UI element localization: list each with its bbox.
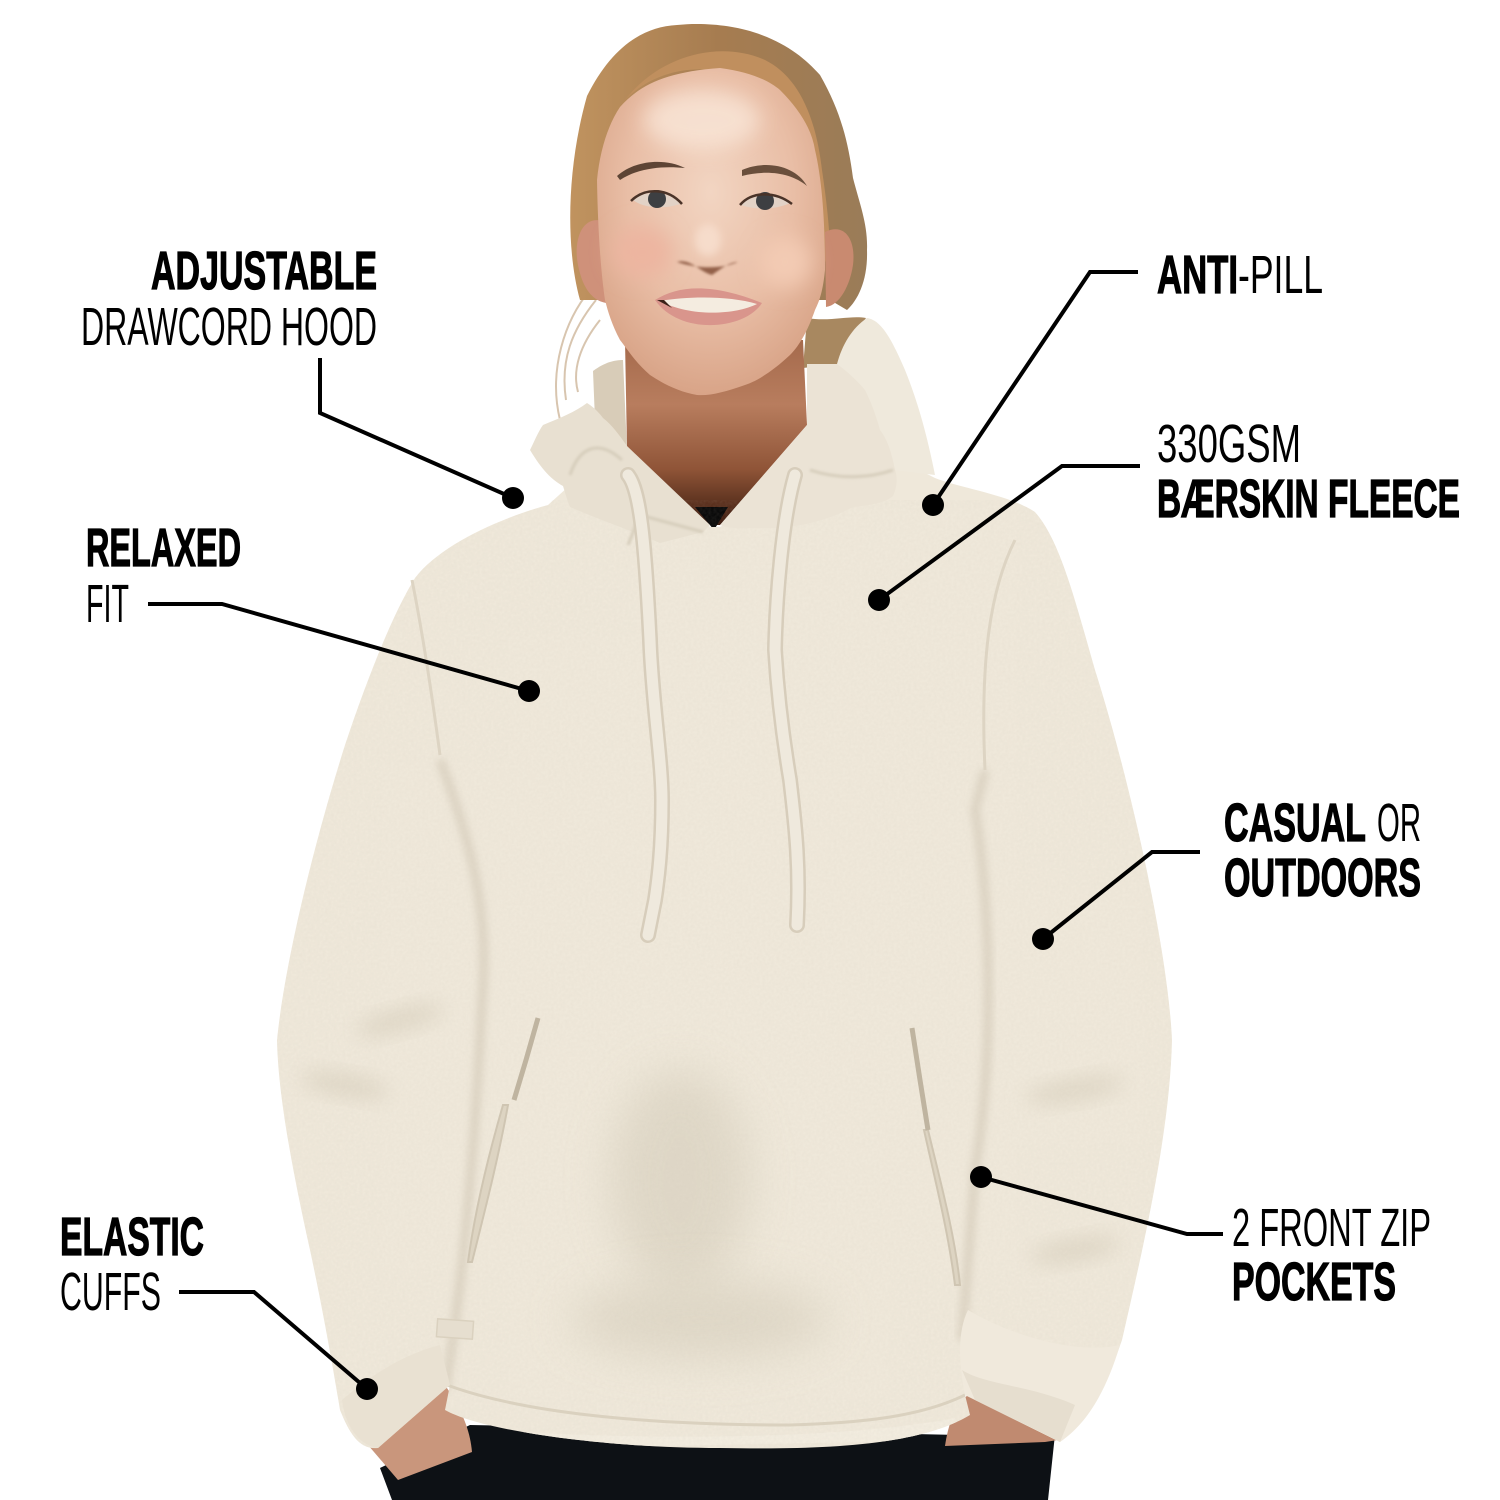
hoodie shading: [270, 500, 1180, 1460]
left drawcord: [628, 475, 662, 935]
mouth: [655, 288, 762, 325]
stray hair strands: [556, 290, 600, 420]
label: CASUAL: [1224, 793, 1366, 853]
leader line: [1043, 852, 1200, 939]
black undershirt: [695, 507, 728, 530]
hood right flap: [720, 364, 897, 528]
face light areas: [644, 90, 760, 150]
callout: adjustable drawcord hood: [81, 241, 524, 509]
ears: [577, 220, 606, 303]
left cuff ribbing: [342, 1345, 450, 1448]
callout: anti-pill: -PILL: [1238, 245, 1323, 305]
callout: anti-pill: [922, 245, 1323, 516]
black trousers: [380, 1425, 1056, 1500]
leader line: [148, 604, 529, 691]
hoodie body: [277, 440, 1172, 1448]
eyes: [631, 190, 792, 210]
raglan seams: [412, 540, 1015, 770]
nose shadow: [677, 261, 738, 275]
label: ANTI: [1157, 245, 1238, 305]
callout: casual or outdoors: [1032, 793, 1421, 950]
eyebrows: [617, 162, 685, 180]
face: [597, 68, 825, 395]
hood back right: [837, 318, 935, 475]
callout: two front zip pockets: [970, 1166, 1431, 1312]
chest label patch: [436, 1319, 474, 1339]
callout: casual or outdoors: OR: [1377, 793, 1421, 853]
leader line: [981, 1177, 1223, 1234]
leader line: [933, 272, 1138, 505]
hair back: [570, 24, 867, 310]
neck: [625, 340, 807, 525]
label: ADJUSTABLE: [151, 241, 377, 301]
right drawcord: [775, 475, 798, 925]
left zip pocket: [468, 1018, 538, 1262]
right cuff: [960, 1310, 1120, 1442]
hood folds: [570, 448, 893, 545]
callout: adjustable drawcord hood: DRAWCORD HOOD: [81, 297, 377, 357]
leader line: [879, 466, 1140, 600]
callout: relaxed fit: [86, 518, 540, 702]
right hand in pocket: [945, 1395, 1058, 1446]
callout: two front zip pockets: POCKETS: [1232, 1252, 1396, 1312]
photo: woman wearing cream fleece hoodie: [270, 24, 1180, 1500]
right cuff ribbing: [962, 1370, 1075, 1442]
label: 330GSM: [1157, 414, 1301, 474]
hem seam: [447, 1385, 965, 1425]
callout: relaxed fit: FIT: [86, 574, 129, 634]
right zip pocket: [912, 1028, 960, 1285]
nose tip: [695, 224, 721, 256]
hair highlight strand over the forehead: [625, 51, 831, 285]
left hand in pocket: [368, 1385, 472, 1480]
leader line: [320, 358, 513, 498]
label: RELAXED: [86, 518, 241, 578]
hood left flap: [530, 403, 710, 543]
callout: 330gsm fleece: [868, 414, 1460, 611]
hair bun at the neck: [803, 317, 866, 368]
leader line: [179, 1292, 367, 1389]
hood back rear left: [593, 360, 627, 450]
callout: elastic cuffs: CUFFS: [60, 1262, 161, 1322]
callout: elastic cuffs: [60, 1207, 378, 1400]
label: ELASTIC: [60, 1207, 204, 1267]
